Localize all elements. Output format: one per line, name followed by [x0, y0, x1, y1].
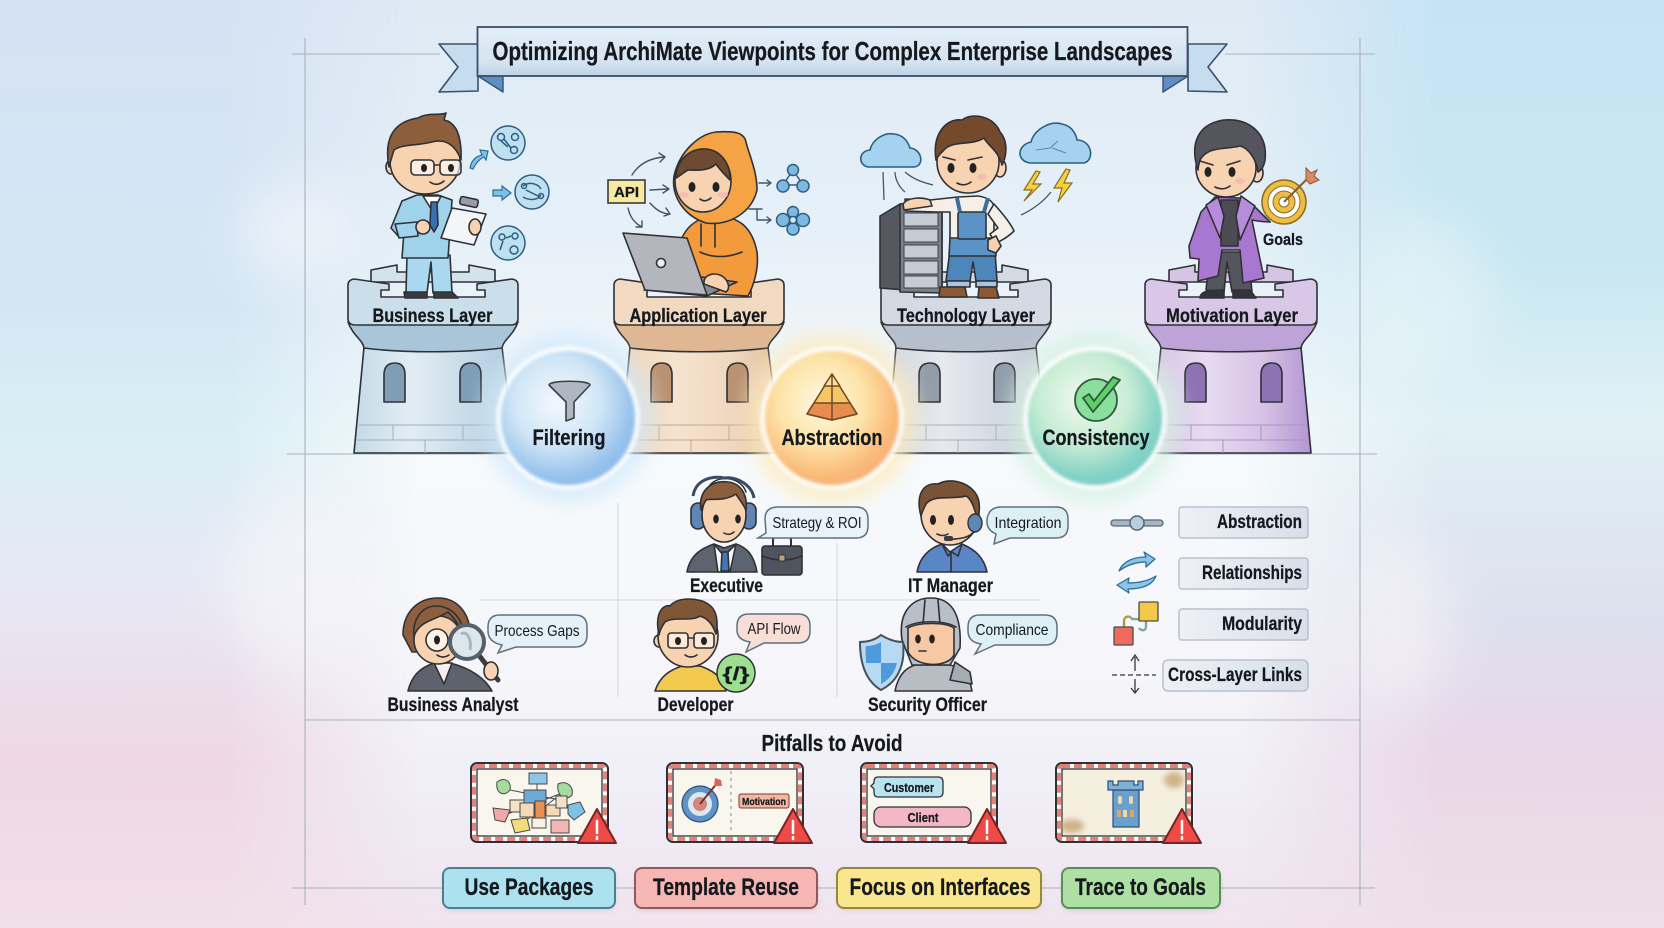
bolt two [1054, 169, 1072, 202]
legend row: modularity: Modularity [1222, 614, 1302, 635]
stakeholder: IT manager [908, 481, 1068, 597]
pitfall card: tangled diagram [471, 763, 616, 843]
target [682, 778, 722, 822]
warning triangle [1163, 809, 1201, 843]
tower: application layer [614, 279, 784, 453]
icons: business process nodes [470, 126, 549, 260]
legend row: abstraction [1179, 507, 1308, 538]
node circle three [491, 226, 525, 260]
frame lines [287, 38, 1377, 905]
tangled shapes [493, 773, 585, 833]
action button: template reuse [635, 868, 817, 910]
stakeholder: executive [687, 477, 868, 597]
icon: relationship arrows [1117, 552, 1156, 593]
icon: funnel [549, 381, 590, 421]
figure [654, 599, 726, 691]
label: goals: Goals [1263, 230, 1303, 249]
figure [917, 481, 987, 572]
speech bubble [737, 614, 810, 652]
action button: template reuse: Template Reuse [653, 874, 799, 901]
action button: trace to goals: Trace to Goals [1075, 874, 1206, 901]
client tag: Client [908, 810, 939, 825]
icon: shield [860, 635, 903, 690]
label: abstraction: Abstraction [782, 425, 882, 450]
figure [687, 477, 757, 572]
title text: Optimizing ArchiMate Viewpoints for Complex Enterprise Landscapes [492, 36, 1172, 66]
wires [883, 172, 1051, 215]
label: Developer [658, 695, 734, 716]
icons: API box and arrows [608, 153, 810, 235]
label: application layer: Application Layer [630, 306, 767, 327]
legend [1111, 507, 1308, 693]
legend row: relationships [1179, 558, 1308, 589]
stakeholder: security officer [860, 598, 1057, 716]
banner plate [478, 27, 1188, 76]
API arrows [628, 153, 771, 227]
legend row: abstraction: Abstraction [1217, 512, 1302, 533]
legend row: cross-layer links: Cross-Layer Links [1168, 665, 1302, 686]
title banner [439, 27, 1227, 92]
icon: magnifier [450, 625, 498, 680]
cloud right [1020, 123, 1091, 163]
speech bubble [987, 507, 1068, 544]
action button: use packages: Use Packages [464, 874, 594, 901]
pitfall card: stale tower [1056, 763, 1201, 843]
speech bubble: Compliance [976, 622, 1049, 639]
node circle two [515, 175, 549, 209]
label: filtering: Filtering [532, 425, 606, 450]
cloud left [861, 134, 921, 167]
speech bubble: Strategy & ROI [772, 515, 862, 532]
legend row: cross-layer links [1163, 660, 1308, 691]
icon: code badge: {/} [722, 664, 750, 684]
legend row: modularity [1179, 609, 1308, 640]
API box [608, 180, 645, 203]
warning triangle [968, 809, 1006, 843]
pitfall card: naming inconsistency [861, 763, 1006, 843]
character: application developer in hoodie [623, 132, 757, 296]
icon: goals target [1262, 168, 1319, 224]
speech bubble: API Flow [748, 621, 801, 638]
bolt one [1024, 171, 1041, 201]
figure [895, 598, 972, 691]
orb: abstraction [746, 332, 918, 504]
label: IT Manager [908, 576, 994, 597]
tower: business layer [348, 265, 518, 453]
tower: technology layer [881, 265, 1051, 453]
warning triangle [774, 809, 812, 843]
headset [968, 514, 982, 532]
customer tag: Customer [884, 780, 934, 795]
speech bubble [488, 615, 587, 653]
orb: consistency [1009, 332, 1181, 504]
stakeholder: business analyst [388, 598, 587, 716]
small tower [1108, 781, 1143, 827]
label: business layer: Business Layer [372, 306, 493, 327]
node circle one [491, 126, 525, 160]
action button: use packages [443, 868, 615, 910]
motivation box: Motivation [742, 796, 786, 808]
icon: modular blocks [1114, 602, 1158, 645]
ribbon tails [439, 44, 1227, 92]
pitfall card: misplaced motivation [667, 763, 812, 843]
speech bubble: Process Gaps [494, 623, 580, 640]
speech bubble [968, 615, 1057, 654]
action button: trace to goals [1062, 868, 1220, 910]
label: consistency: Consistency [1042, 425, 1150, 450]
character: business analyst on tower [386, 113, 486, 298]
icon: cross-layer links [1112, 655, 1156, 693]
figure [403, 598, 492, 691]
arrow up right [470, 150, 488, 169]
client tag [874, 807, 971, 827]
icon: check mark [1075, 377, 1120, 421]
label: technology layer: Technology Layer [897, 306, 1036, 327]
stakeholder: developer [654, 599, 810, 716]
label: Business Analyst [388, 695, 519, 716]
label: Security Officer [868, 695, 988, 716]
customer tag [871, 777, 943, 797]
crack lines [1036, 141, 1066, 153]
icon: pyramid [807, 374, 857, 420]
action button: focus on interfaces: Focus on Interfaces [850, 874, 1030, 901]
arrow right [493, 186, 511, 200]
icon: briefcase [762, 537, 802, 575]
speech bubble [758, 507, 868, 538]
app cluster one [777, 164, 809, 192]
orb: filtering [482, 332, 654, 504]
icons: clouds and lightning [861, 123, 1091, 215]
icon: slider [1111, 516, 1163, 530]
character: motivation strategist in purple coat [1189, 120, 1270, 298]
tower labels [372, 306, 1299, 327]
heading: pitfalls to avoid: Pitfalls to Avoid [762, 730, 902, 756]
action button: focus on interfaces [837, 868, 1041, 910]
API box: API [614, 184, 639, 201]
legend row: relationships: Relationships [1202, 563, 1302, 584]
label: Executive [690, 576, 763, 597]
icon: code badge [717, 654, 755, 692]
stains [1060, 772, 1184, 833]
tower: motivation layer [1145, 265, 1317, 453]
label: motivation layer: Motivation Layer [1166, 306, 1299, 327]
character: technology engineer with server [880, 116, 1014, 298]
speech bubble: Integration [994, 515, 1062, 532]
app cluster two [776, 206, 810, 235]
server rack [880, 203, 942, 293]
warning triangle [578, 809, 616, 843]
